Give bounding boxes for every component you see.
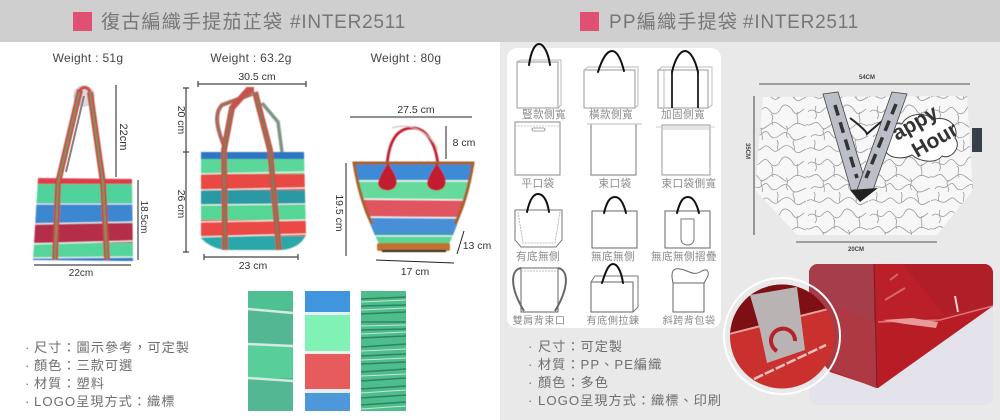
icon: drawstring bag: 束口袋 bbox=[599, 177, 631, 190]
icon: foldable bbox=[651, 197, 717, 263]
spec list: PP bag: 材質：PP、PE編織 bbox=[538, 357, 662, 372]
colour swatch: green bbox=[248, 291, 293, 411]
callout: Happy Hour cloud: Hour bbox=[908, 118, 962, 162]
icon: flat bag bbox=[515, 122, 560, 190]
bag 1 with dimensions bbox=[30, 85, 149, 279]
icon: hook bbox=[74, 86, 94, 106]
bag 2 with dimensions: 30.5 cm bbox=[238, 71, 276, 83]
bag 3 with dimensions bbox=[333, 104, 492, 278]
photo: red bag corner bbox=[809, 264, 993, 388]
icon: bottom no side bbox=[515, 194, 562, 263]
spec list: rattan bag: · bbox=[25, 376, 30, 391]
photo: doodle tote with dimensions: 20CM bbox=[848, 247, 864, 253]
icon: backpack drawstring: 雙肩背束口 bbox=[513, 314, 565, 327]
icon: zip bag bbox=[587, 264, 639, 327]
spec list: rattan bag bbox=[25, 340, 190, 409]
callout: woven label close-up bbox=[724, 278, 840, 395]
spec list: PP bag: 尺寸：可定製 bbox=[538, 339, 623, 354]
icon: zip bag: 有底側拉鍊 bbox=[587, 314, 639, 327]
spec list: PP bag: 顏色：多色 bbox=[538, 374, 609, 390]
bag 1 with dimensions: 18.5cm bbox=[138, 201, 149, 233]
icon: horizontal gusset bbox=[584, 51, 638, 121]
bag 1 with dimensions: 22cm bbox=[117, 124, 129, 150]
bag 2 with dimensions bbox=[175, 71, 308, 272]
icon: bottom no side: 有底無側 bbox=[516, 250, 560, 263]
spec list: rattan bag: 顏色：三款可選 bbox=[34, 357, 133, 373]
icon: flat bag: 平口袋 bbox=[522, 177, 554, 190]
bag 3 with dimensions: 27.5 cm bbox=[397, 104, 435, 116]
icon: horizontal gusset: 橫款側寬 bbox=[589, 108, 633, 121]
spec list: PP bag: · bbox=[528, 357, 533, 372]
icon: drawstring gusset bag bbox=[656, 125, 716, 190]
bag 2 with dimensions: 20 cm bbox=[175, 106, 187, 135]
bag 3 with dimensions: 8 cm bbox=[453, 137, 476, 149]
bag 3 with dimensions: 17 cm bbox=[401, 266, 430, 278]
colour swatch: stripes bbox=[361, 291, 406, 411]
icon: vertical gusset: 豎款側寬 bbox=[522, 108, 566, 121]
photo: doodle tote with dimensions bbox=[744, 75, 982, 253]
bag 1 with dimensions: 22cm bbox=[69, 268, 93, 279]
spec list: PP bag: · bbox=[528, 375, 533, 390]
spec list: PP bag: · bbox=[528, 339, 533, 354]
icon: reinforced gusset: 加固側寬 bbox=[661, 108, 705, 121]
spec list: PP bag bbox=[528, 339, 722, 408]
tag bbox=[972, 128, 982, 152]
callout: Happy Hour cloud bbox=[876, 101, 962, 162]
spec list: rattan bag: 材質：塑料 bbox=[34, 375, 105, 391]
bag 2 with dimensions: 26 cm bbox=[175, 190, 187, 219]
colour swatch: multi bbox=[305, 291, 350, 411]
heading: rattan bag bbox=[73, 11, 406, 33]
icon: foldable: 無底無側摺疊 bbox=[651, 250, 717, 263]
heading: rattan bag: 復古編織手提茄芷袋 bbox=[101, 12, 283, 33]
photo: doodle tote with dimensions: 35CM bbox=[744, 143, 750, 159]
weight labels bbox=[53, 51, 441, 65]
heading: PP bag: PP編織手提袋 bbox=[609, 12, 738, 33]
spec list: rattan bag: · bbox=[25, 340, 30, 355]
spec list: rattan bag: · bbox=[25, 358, 30, 373]
spec list: PP bag: · bbox=[528, 393, 533, 408]
weight labels: Weight : 51g bbox=[53, 51, 123, 65]
icon: drawstring gusset bag: 束口袋側寬 bbox=[662, 177, 716, 190]
callout: Happy Hour cloud: appy bbox=[888, 101, 942, 145]
icon: crossbody: 斜跨背包袋 bbox=[663, 314, 715, 327]
spec list: rattan bag: 尺寸：圖示參考，可定製 bbox=[34, 340, 190, 355]
heading: rattan bag: #INTER2511 bbox=[290, 12, 406, 33]
bag 2 with dimensions: 23 cm bbox=[239, 260, 268, 272]
bag 3 with dimensions: 19.5 cm bbox=[333, 194, 345, 232]
icon: no bottom no side bbox=[591, 197, 637, 263]
header band bbox=[0, 0, 1000, 42]
panel: bag style icons bbox=[507, 44, 721, 328]
spec list: PP bag: LOGO呈現方式：織標、印刷 bbox=[538, 393, 722, 408]
icon: vertical gusset bbox=[517, 44, 566, 121]
icon: no bottom no side: 無底無側 bbox=[591, 250, 635, 263]
icon: drawstring bag bbox=[587, 124, 642, 190]
weight labels: Weight : 80g bbox=[371, 51, 441, 65]
spec list: rattan bag: · bbox=[25, 394, 30, 409]
panel: right background bbox=[500, 42, 1000, 420]
bag 3 with dimensions: 13 cm bbox=[463, 240, 492, 252]
photo: doodle tote with dimensions: 54CM bbox=[859, 75, 875, 81]
icon: reinforced gusset bbox=[658, 51, 712, 121]
weight labels: Weight : 63.2g bbox=[210, 51, 292, 65]
icon: crossbody bbox=[663, 269, 715, 327]
icon: backpack drawstring bbox=[513, 268, 566, 327]
heading: PP bag bbox=[580, 11, 859, 33]
heading: PP bag: #INTER2511 bbox=[743, 12, 859, 33]
spec list: rattan bag: LOGO呈現方式：織標 bbox=[34, 394, 175, 409]
